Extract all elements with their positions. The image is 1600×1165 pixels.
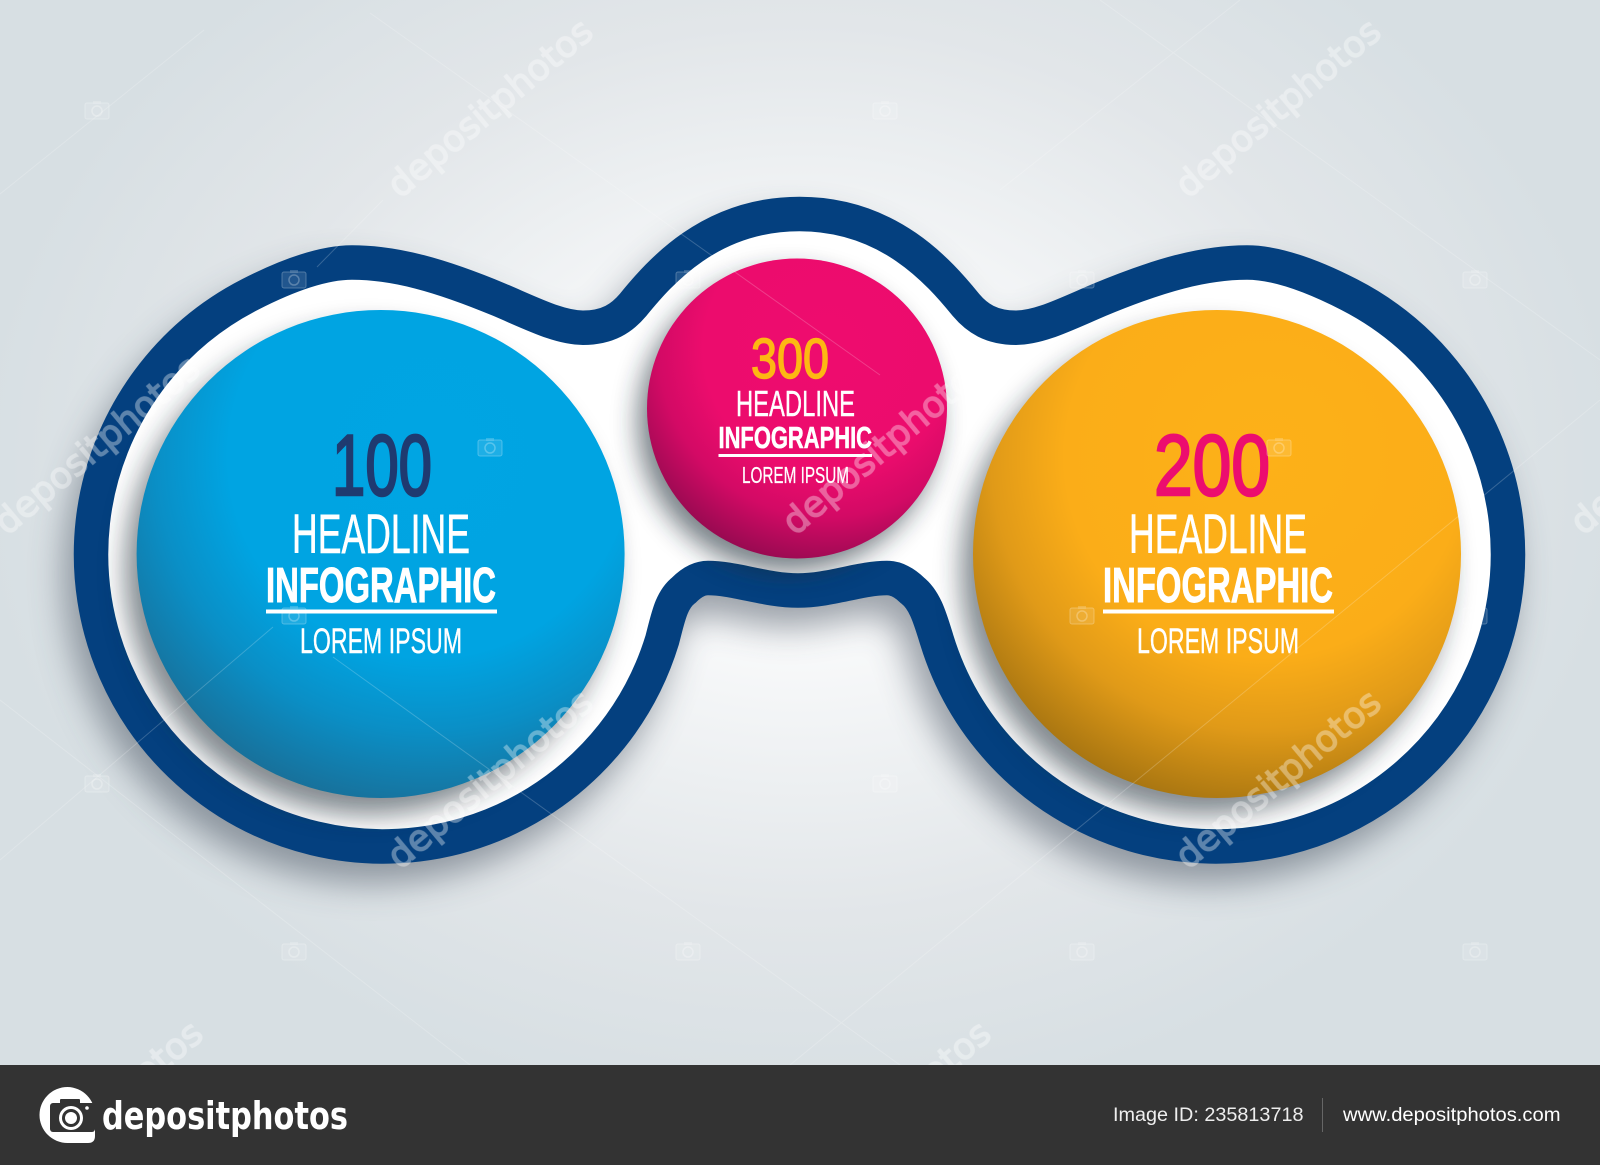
- divider: [1322, 1098, 1323, 1132]
- number 100: 100: [332, 418, 432, 514]
- watermark overlay: depositphotos: [1167, 682, 1389, 877]
- underline: [1103, 610, 1334, 614]
- icon: camera logo: [40, 1087, 95, 1143]
- watermark overlay: depositphotos: [1167, 11, 1389, 206]
- lorem ipsum text: LOREM IPSUM: [300, 622, 462, 661]
- number 200: 200: [1154, 418, 1270, 514]
- footer bar: [0, 1065, 1600, 1165]
- underline: [266, 610, 497, 614]
- outline shadow: [81, 234, 1498, 866]
- lorem ipsum text: LOREM IPSUM: [742, 462, 849, 488]
- headline text: HEADLINE: [292, 502, 470, 565]
- infographic text: INFOGRAPHIC: [1103, 559, 1333, 613]
- number 300: 300: [751, 327, 829, 391]
- panel: orange circle 200: [961, 310, 1461, 815]
- infographic text: INFOGRAPHIC: [266, 559, 496, 613]
- panel: blue circle 100: [125, 310, 625, 815]
- panel: pink circle 300: [638, 258, 947, 572]
- connected ring outline: [91, 214, 1508, 846]
- lorem ipsum text: LOREM IPSUM: [1137, 622, 1299, 661]
- image id: Image ID: 235813718: [1113, 1104, 1304, 1126]
- website url: www.depositphotos.com: [1342, 1104, 1560, 1126]
- watermark overlay: depositphotos: [379, 11, 601, 206]
- watermark overlay: depositphotos: [774, 348, 996, 543]
- headline text: HEADLINE: [1129, 502, 1307, 565]
- underline: [718, 454, 872, 457]
- headline text: HEADLINE: [736, 383, 855, 424]
- watermark overlay: depositphotos: [379, 682, 601, 877]
- infographic text: INFOGRAPHIC: [718, 420, 872, 455]
- logo wordmark: depositphotos: [102, 1094, 348, 1138]
